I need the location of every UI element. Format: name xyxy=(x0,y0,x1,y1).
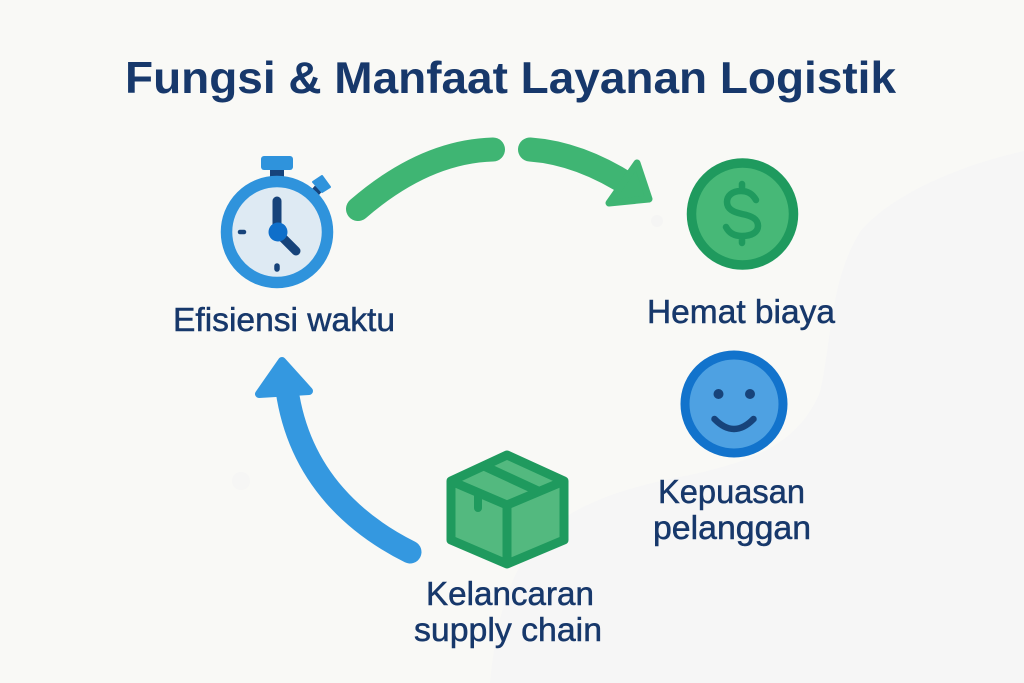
label: kepuasan pelanggan: Kepuasan xyxy=(658,473,805,510)
icon: smiley xyxy=(685,355,783,453)
label: kelancaran supply chain xyxy=(414,575,602,648)
label: efisiensi waktu: Efisiensi waktu xyxy=(173,301,395,338)
arrow: time to cost, second segment with head xyxy=(530,150,649,203)
label: kepuasan pelanggan: pelanggan xyxy=(653,509,811,546)
icon: box xyxy=(451,455,564,564)
title: Fungsi & Manfaat Layanan Logistik xyxy=(125,54,896,103)
label: hemat biaya: Hemat biaya xyxy=(647,293,836,330)
label: kepuasan pelanggan xyxy=(653,473,811,546)
arrow: supply chain to time xyxy=(259,361,410,552)
arrow: time to cost, first segment xyxy=(358,150,493,209)
label: kelancaran supply chain: supply chain xyxy=(414,611,602,648)
icon: stopwatch xyxy=(226,156,330,282)
icon: dollar coin xyxy=(692,163,794,265)
label: kelancaran supply chain: Kelancaran xyxy=(426,575,594,612)
